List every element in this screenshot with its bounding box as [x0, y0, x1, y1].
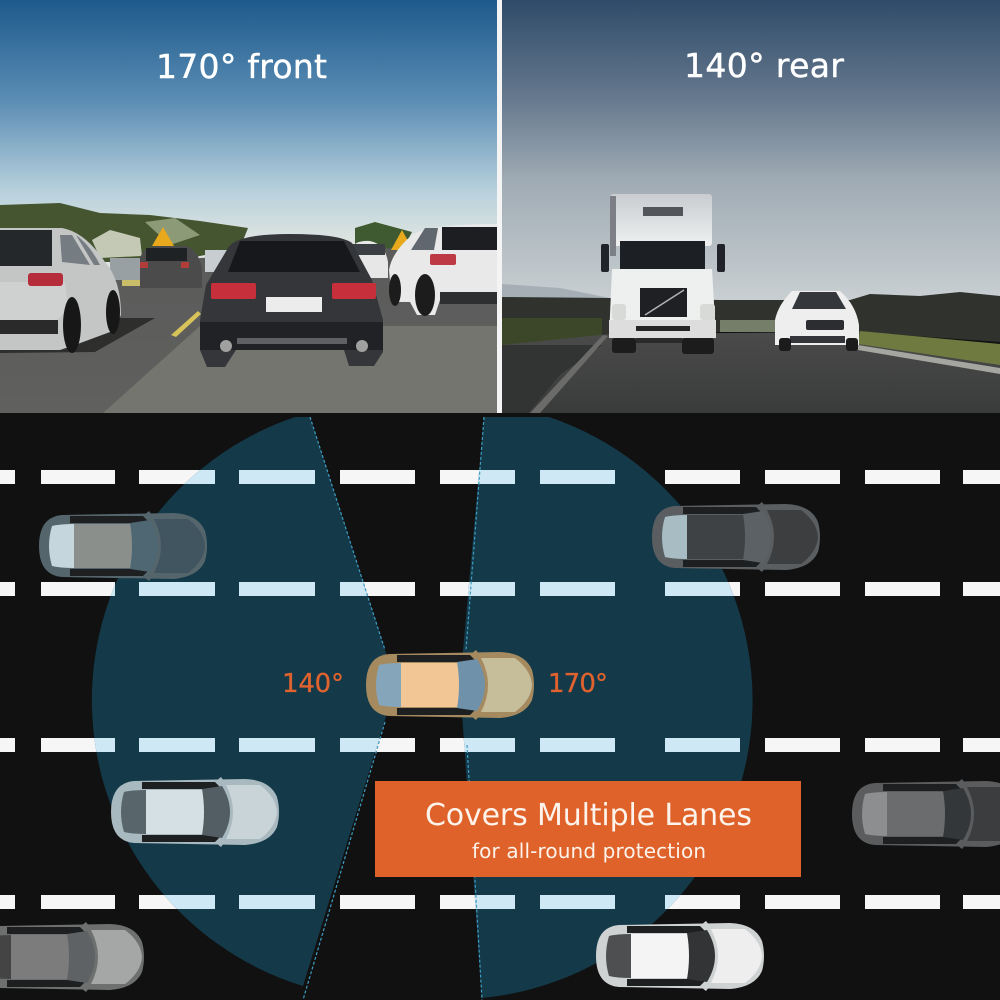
coverage fan: 170 degree front: [462, 417, 752, 999]
white SUV right: [389, 224, 497, 316]
silver car left: [0, 228, 155, 353]
car: bottom left: [0, 922, 144, 992]
white car ahead: [351, 241, 388, 278]
callout: [375, 781, 801, 877]
photo: 170 degree front view: [0, 0, 497, 413]
icon: warning signs: [152, 227, 413, 250]
car: centre orange: [366, 650, 534, 720]
car: upper left: [39, 511, 207, 581]
lane markings: [0, 470, 1000, 909]
car: far right: [852, 779, 1000, 849]
angle label: 140: 140°: [282, 669, 344, 699]
road background: [0, 413, 1000, 1000]
heading: 140 rear: 140° rear: [684, 46, 844, 85]
callout: for all-round protection: [472, 839, 706, 863]
divider: [497, 0, 502, 413]
angle label: 170: 170°: [548, 669, 608, 699]
heading: 170 front: 170° front: [156, 47, 327, 86]
truck: [601, 194, 725, 354]
coverage fan: 140 degree rear: [92, 417, 386, 986]
callout: Covers Multiple Lanes: [425, 798, 752, 833]
white SUV following: [775, 291, 859, 351]
grey car ahead: [140, 246, 202, 288]
car: upper right: [652, 502, 820, 572]
black car centre: [200, 234, 383, 367]
fan edge lines: [303, 417, 484, 1000]
car: lower left: [111, 777, 279, 847]
car: bottom centre: [596, 921, 764, 991]
photo: 140 degree rear view: [502, 0, 1000, 413]
